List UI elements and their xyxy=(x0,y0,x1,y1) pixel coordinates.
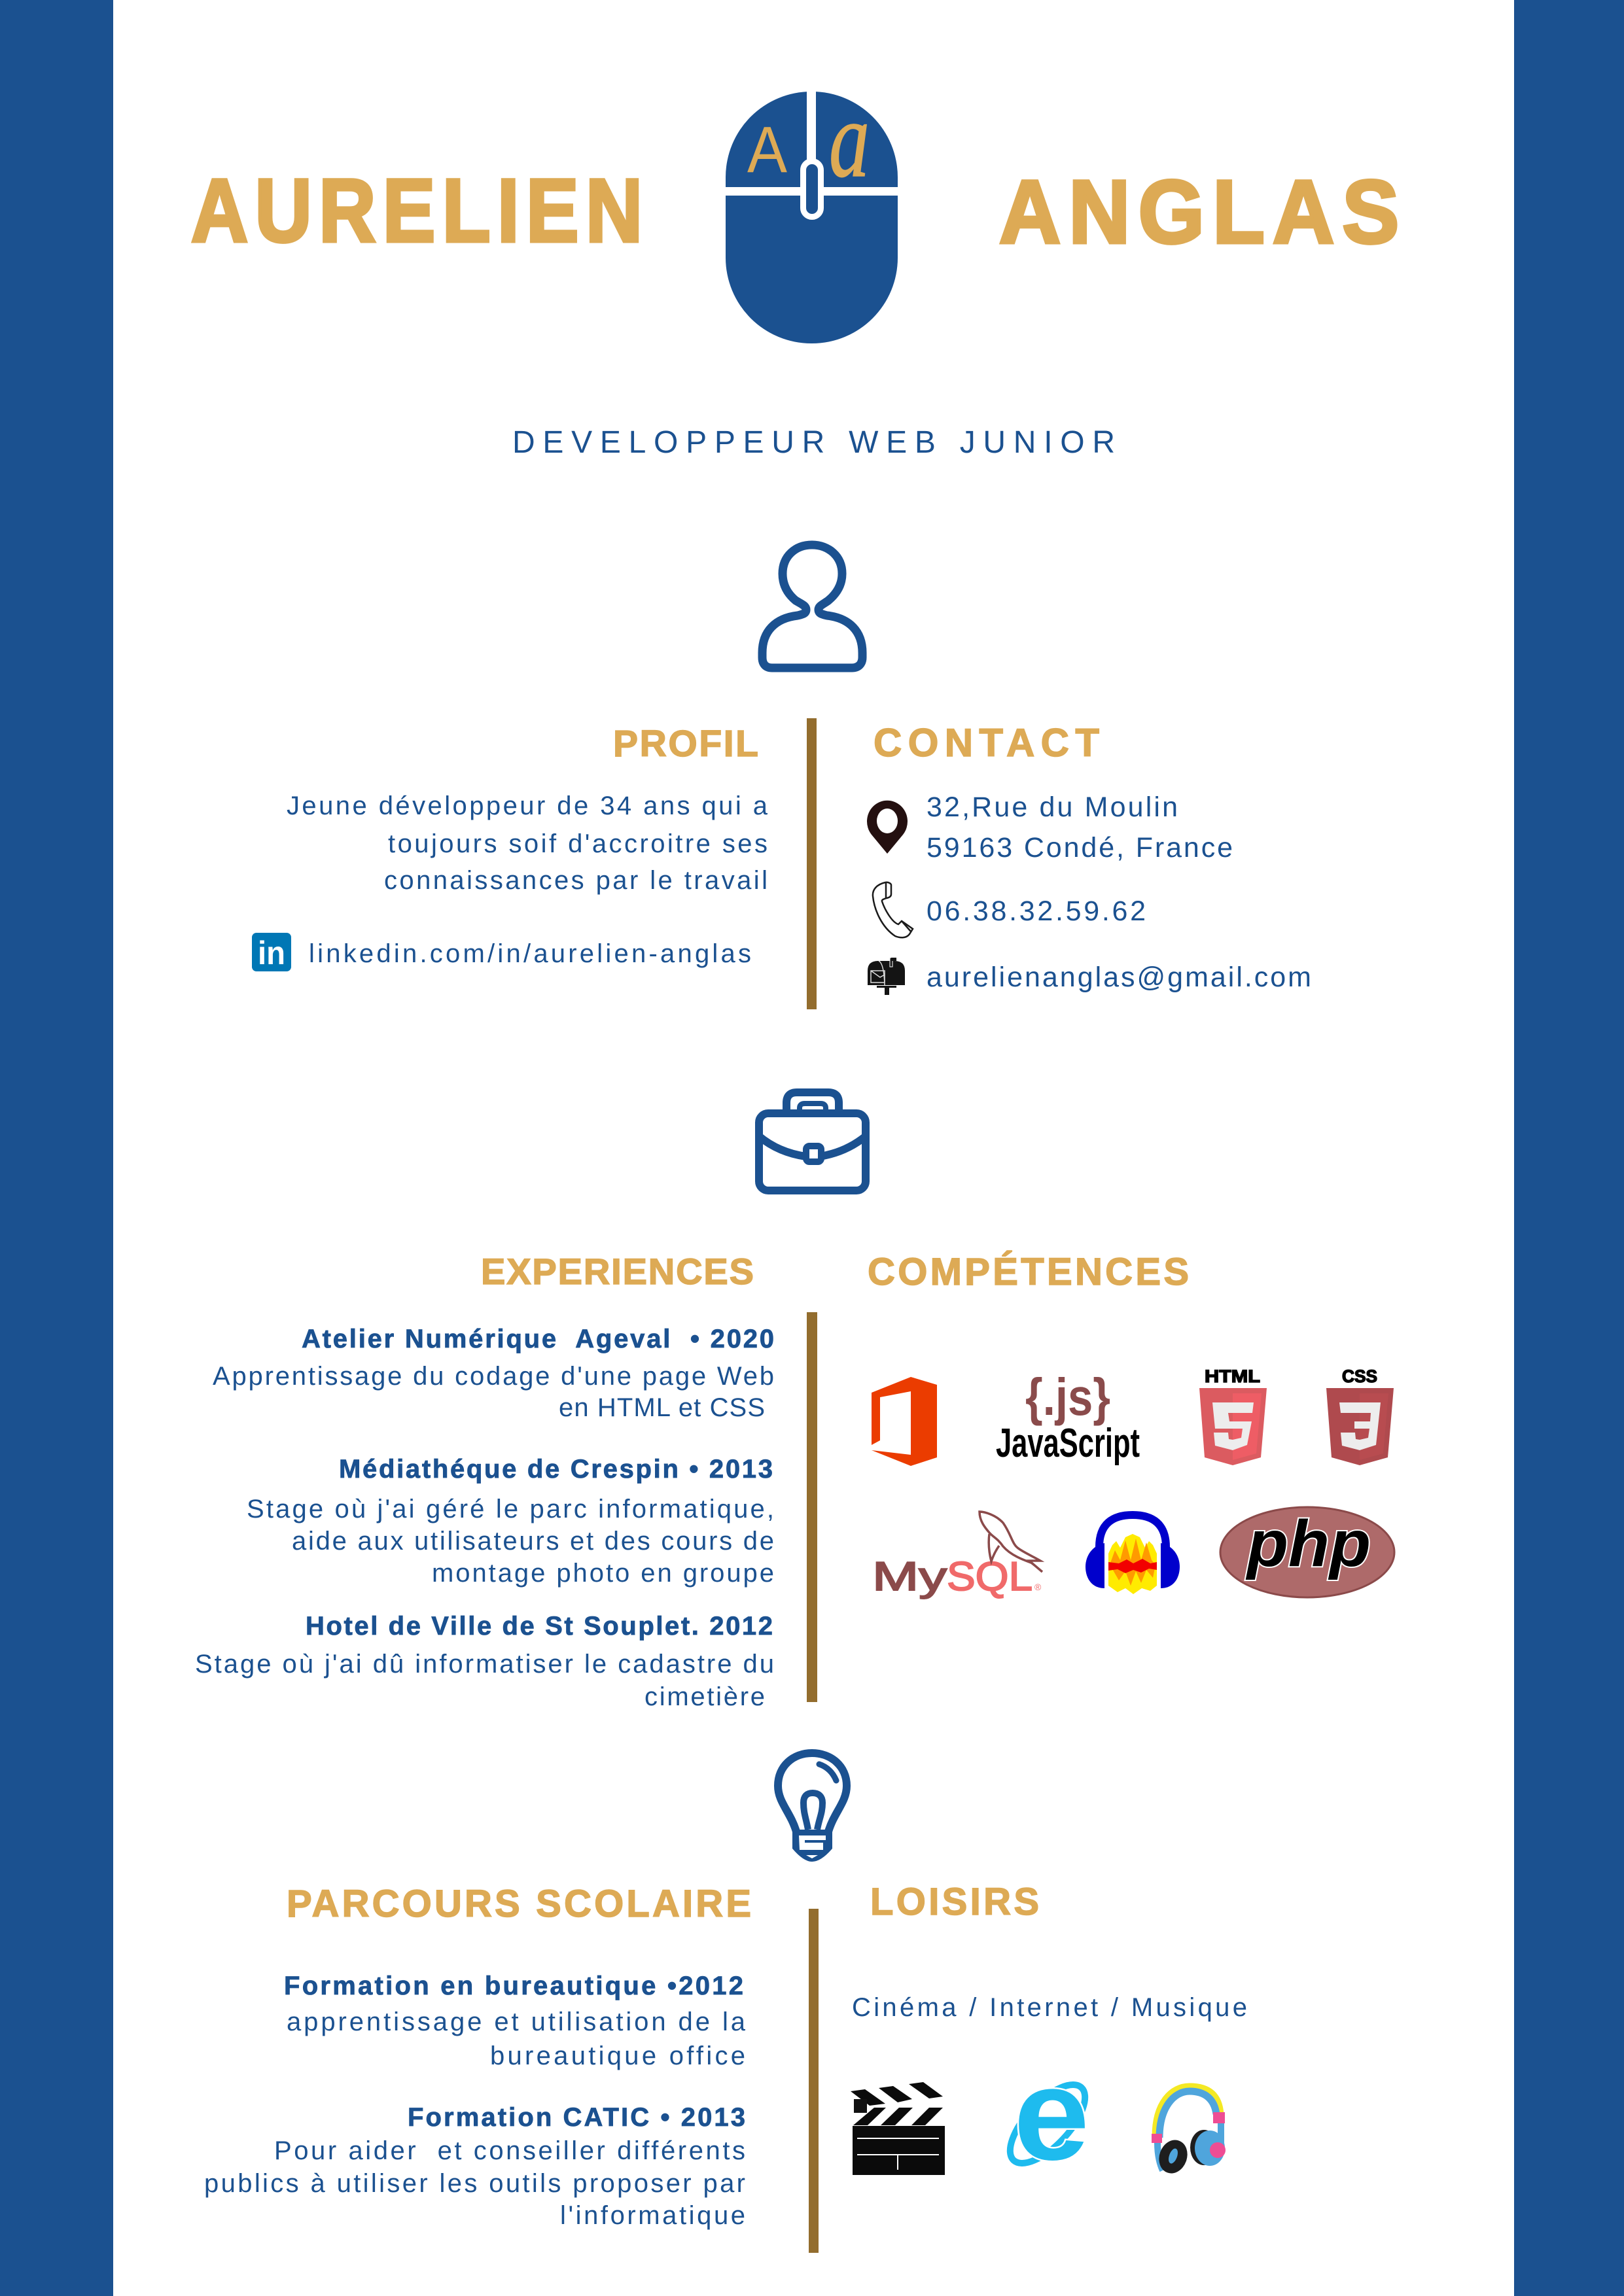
text: phone number: 06.38.32.59.62 xyxy=(927,896,1146,927)
panel: experiences xyxy=(195,1251,774,1711)
icon: css3: CSS xyxy=(1342,1366,1377,1386)
heading: profil: PROFIL xyxy=(613,723,758,765)
icon: html5 xyxy=(1199,1366,1267,1465)
title: last name: ANGLAS xyxy=(999,162,1407,262)
entry: atelier numerique: en HTML et CSS xyxy=(559,1393,765,1422)
entry: formation catic: Formation CATIC • 2013 xyxy=(408,2103,745,2132)
right blue band xyxy=(1514,0,1624,2296)
icon: light bulb xyxy=(778,1753,847,1862)
entry: formation bureautique: Formation en bureautique •2012 xyxy=(284,1972,743,2000)
icon: clapperboard xyxy=(851,2082,945,2175)
entry: atelier numerique xyxy=(213,1325,774,1422)
icon: mysql: SQL xyxy=(947,1554,1033,1599)
text block: profil description xyxy=(287,791,768,895)
icon: mysql: My xyxy=(872,1554,947,1599)
panel: parcours scolaire xyxy=(204,1883,751,2230)
header xyxy=(191,78,1407,460)
divider: experiences / competences xyxy=(807,1312,817,1702)
icon: mailbox xyxy=(868,958,905,995)
entry: atelier numerique: Atelier Numérique Ageval • 2020 xyxy=(302,1325,774,1353)
panel: profil xyxy=(252,723,768,971)
left blue band xyxy=(0,0,113,2296)
text block: profil description: connaissances par le travail xyxy=(384,866,768,895)
icon: person xyxy=(762,545,862,668)
entry: hotel de ville: Hotel de Ville de St Souplet. 2012 xyxy=(306,1612,773,1641)
panel: contact xyxy=(867,721,1311,995)
icon: mouse logo xyxy=(726,78,898,343)
entry: formation bureautique xyxy=(284,1972,746,2070)
title: first name: AURELIEN xyxy=(191,161,650,261)
entry: formation catic: Pour aider et conseiller différents xyxy=(274,2136,745,2165)
icon: mysql xyxy=(872,1512,1042,1599)
heading: competences: COMPÉTENCES xyxy=(868,1251,1189,1293)
icon: php: php xyxy=(1245,1507,1371,1580)
heading: contact: CONTACT xyxy=(874,721,1099,765)
text: address xyxy=(927,791,1233,863)
text: email: aurelienanglas@gmail.com xyxy=(927,962,1311,993)
text block: profil description: toujours soif d'accroitre ses xyxy=(388,829,768,858)
entry: hotel de ville: Stage où j'ai dû informatiser le cadastre du xyxy=(195,1650,774,1679)
text block: profil description: Jeune développeur de 34 ans qui a xyxy=(287,791,768,820)
entry: formation catic xyxy=(204,2103,745,2230)
entry: hotel de ville xyxy=(195,1612,774,1711)
icon: phone xyxy=(873,882,913,937)
entry: mediatheque: aide aux utilisateurs et des cours de xyxy=(292,1527,774,1556)
heading: experiences: EXPERIENCES xyxy=(481,1251,754,1292)
text: address: 32,Rue du Moulin xyxy=(927,791,1178,823)
entry: mediatheque: Médiathéque de Crespin • 2013 xyxy=(339,1455,773,1484)
entry: atelier numerique: Apprentissage du codage d'une page Web xyxy=(213,1362,774,1391)
icon: internet explorer: e xyxy=(1014,2042,1089,2187)
divider: profil / contact xyxy=(807,718,817,1009)
icon: php xyxy=(1220,1507,1394,1597)
entry: mediatheque: Stage où j'ai géré le parc informatique, xyxy=(247,1495,774,1523)
divider: parcours / loisirs xyxy=(809,1909,819,2253)
subtitle: DEVELOPPEUR WEB JUNIOR xyxy=(512,425,1115,460)
entry: formation catic: l'informatique xyxy=(560,2201,745,2230)
icon: audacity xyxy=(1086,1515,1180,1594)
entry: mediatheque xyxy=(247,1455,774,1588)
entry: formation bureautique: apprentissage et utilisation de la xyxy=(287,2008,746,2036)
text: hobbies list: Cinéma / Internet / Musique xyxy=(852,1993,1247,2022)
entry: formation bureautique: bureautique office xyxy=(490,2042,745,2070)
icon: headphones xyxy=(1152,2086,1226,2178)
icon: office xyxy=(872,1377,937,1466)
icon: html5: HTML xyxy=(1205,1366,1260,1386)
icon: mysql: ® xyxy=(1034,1582,1042,1592)
icon: linkedin: in xyxy=(258,935,285,971)
heading: parcours scolaire: PARCOURS SCOLAIRE xyxy=(287,1883,751,1925)
icon: javascript: JavaScript xyxy=(996,1421,1140,1466)
text: address: 59163 Condé, France xyxy=(927,832,1233,863)
icon: javascript xyxy=(996,1368,1140,1466)
icon: location pin xyxy=(867,801,908,854)
heading: loisirs: LOISIRS xyxy=(870,1881,1039,1923)
icon: css3 xyxy=(1326,1366,1394,1465)
entry: mediatheque: montage photo en groupe xyxy=(432,1559,774,1588)
entry: hotel de ville: cimetière xyxy=(644,1682,765,1711)
icon: mouse logo: A xyxy=(747,113,787,186)
panel: competences xyxy=(868,1251,1394,1599)
icon: mouse logo: a xyxy=(829,78,870,200)
icon: javascript: {.js} xyxy=(1025,1368,1110,1426)
entry: formation catic: publics à utiliser les outils proposer par xyxy=(204,2169,745,2198)
icon: briefcase xyxy=(759,1092,866,1191)
panel: loisirs xyxy=(851,1881,1247,2187)
text: linkedin url: linkedin.com/in/aurelien-anglas xyxy=(309,939,751,968)
